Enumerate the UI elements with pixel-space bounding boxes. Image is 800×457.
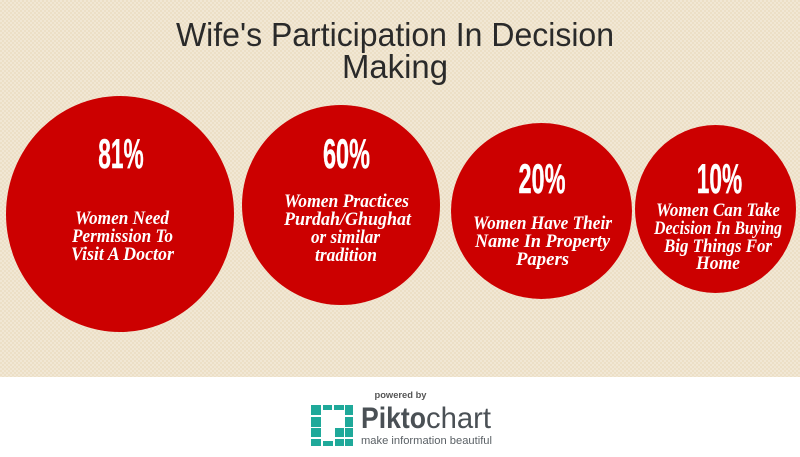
panel: 81% doctor permission <box>6 96 234 332</box>
label: property papers: Women Have Their <box>473 213 613 234</box>
panel: 60% purdah <box>242 105 440 305</box>
label: property papers: Name In Property <box>474 231 611 252</box>
stat: 60%: 60% <box>323 131 370 178</box>
title: Wife's Participation In Decision <box>176 16 614 53</box>
stat: 20%: 20% <box>518 156 566 203</box>
label: doctor permission: Permission To <box>71 226 173 247</box>
label: big purchases: Home <box>695 253 741 274</box>
label: doctor permission: Women Need <box>75 208 169 229</box>
label: property papers <box>473 213 613 270</box>
label: big purchases: Women Can Take <box>656 200 780 221</box>
wordmark: chart: chart <box>426 402 492 435</box>
label: big purchases <box>653 200 782 274</box>
label: doctor permission: Visit A Doctor <box>71 244 175 265</box>
label: purdah: Women Practices <box>284 191 409 212</box>
panel: 20% property papers <box>451 123 632 299</box>
footer: Piktochart branding <box>311 390 492 447</box>
panel: 10% big purchases <box>635 125 796 293</box>
tagline: make information beautiful <box>361 435 492 447</box>
icon: Piktochart logo <box>311 405 353 446</box>
label: doctor permission <box>71 208 175 265</box>
label: property papers: Papers <box>515 249 569 270</box>
wordmark: Pikto: Pikto <box>361 402 426 435</box>
label: purdah <box>283 191 412 266</box>
title: Making <box>342 48 448 85</box>
title <box>176 16 614 85</box>
label: purdah: tradition <box>315 245 377 266</box>
stat: 81%: 81% <box>98 131 144 178</box>
label: big purchases: Big Things For <box>663 236 773 257</box>
label: purdah: Purdah/Ghughat <box>283 209 412 230</box>
text: powered by: powered by <box>374 390 427 401</box>
label: purdah: or similar <box>311 227 381 248</box>
stat: 10%: 10% <box>697 156 742 203</box>
